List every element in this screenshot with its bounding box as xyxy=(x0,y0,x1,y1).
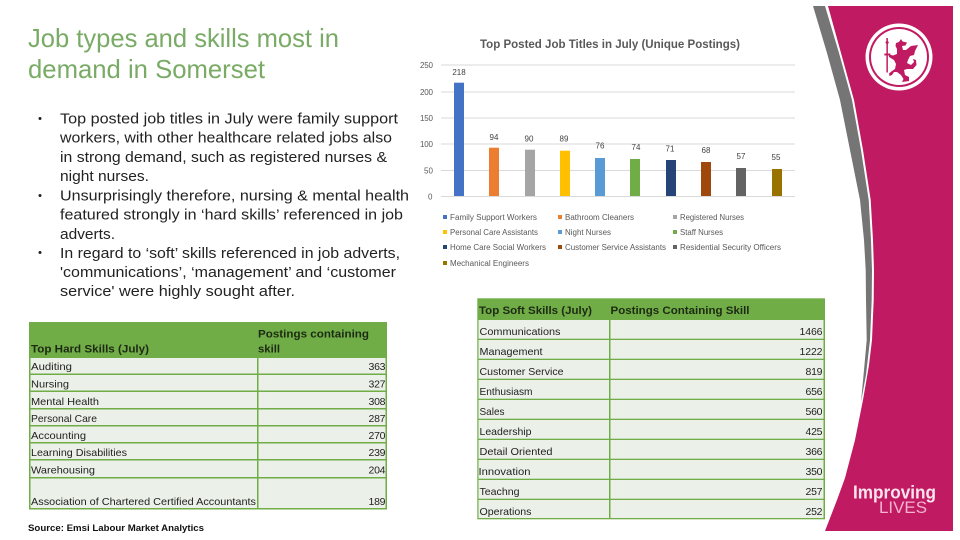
table rows: Warehousing xyxy=(31,465,95,477)
table rows: 204 xyxy=(368,465,386,477)
table: top hard skills xyxy=(29,322,387,510)
table rows: 819 xyxy=(806,366,823,378)
table rows: Communications xyxy=(480,326,560,338)
table rows xyxy=(478,326,823,518)
bullet text block: 'communications’, ‘management’ and ‘customer xyxy=(60,264,396,281)
table rows: Learning Disabilities xyxy=(31,447,127,459)
bullet text block: Unsurprisingly therefore, nursing & mental health xyxy=(60,188,409,204)
bullet text block: Top posted job titles in July were family support xyxy=(60,110,399,128)
bullet text block: night nurses. xyxy=(60,168,149,185)
table rows: Innovation xyxy=(478,466,531,478)
bars xyxy=(454,83,782,196)
bullet text block: adverts. xyxy=(60,226,115,243)
table: top soft skills xyxy=(477,298,825,519)
table rows: Teachng xyxy=(480,486,520,498)
legend: Residential Security Officers xyxy=(680,243,781,252)
legend: Registered Nurses xyxy=(680,213,744,222)
data labels: 68 xyxy=(702,146,711,155)
data labels xyxy=(452,68,781,162)
bullet text block: In regard to ‘soft’ skills referenced in job adverts, xyxy=(60,245,400,262)
table rows: Customer Service xyxy=(480,366,564,378)
legend xyxy=(443,213,781,268)
legend: Bathroom Cleaners xyxy=(565,213,634,222)
table rows: 270 xyxy=(368,430,386,442)
chart title: Top Posted Job Titles in July (Unique Postings) xyxy=(480,37,740,51)
title: demand in Somerset xyxy=(28,54,266,84)
data labels: 74 xyxy=(632,143,641,152)
table rows: 366 xyxy=(806,446,823,458)
data labels: 90 xyxy=(525,135,534,144)
title xyxy=(28,23,339,84)
logo text: Improving Lives xyxy=(853,482,936,517)
data labels: 89 xyxy=(560,135,569,144)
table grid xyxy=(477,298,825,519)
brand panel: curved magenta band xyxy=(813,6,953,531)
logo text: Improving Lives: LIVES xyxy=(879,498,927,517)
bullet text block: in strong demand, such as registered nurses & xyxy=(60,149,387,166)
table header xyxy=(479,305,750,317)
legend: Personal Care Assistants xyxy=(450,228,538,237)
table rows: 189 xyxy=(368,496,386,508)
table rows: 1466 xyxy=(800,326,823,338)
data labels: 218 xyxy=(452,68,466,77)
table header: skill xyxy=(258,344,280,356)
data labels: 71 xyxy=(666,145,675,154)
y axis and grid: 200 xyxy=(420,88,434,97)
table header xyxy=(31,329,369,356)
table rows: Sales xyxy=(480,406,504,418)
y axis and grid: 250 xyxy=(420,61,434,70)
table header: Postings containing xyxy=(258,329,369,341)
table rows: 252 xyxy=(806,506,823,518)
table rows: 1222 xyxy=(800,346,823,358)
table rows: Enthusiasm xyxy=(480,386,533,398)
table rows: 308 xyxy=(368,396,386,408)
logo text: Improving Lives: Improving xyxy=(853,482,936,502)
legend: Customer Service Assistants xyxy=(565,243,666,252)
table rows: Management xyxy=(480,346,543,358)
bullet text block: workers, with other healthcare related jobs also xyxy=(59,130,392,147)
table rows: Operations xyxy=(480,506,532,518)
data labels: 94 xyxy=(490,133,499,142)
table rows: Personal Care xyxy=(31,413,97,425)
table rows: 287 xyxy=(368,413,386,425)
legend: Night Nurses xyxy=(565,228,611,237)
bullet text block: service' were highly sought after. xyxy=(60,283,295,300)
table rows: 656 xyxy=(806,386,823,398)
data labels: 55 xyxy=(772,153,781,162)
table rows: Mental Health xyxy=(31,396,99,408)
bullet text block: featured strongly in ‘hard skills’ referenced in job xyxy=(60,206,403,224)
table rows: 425 xyxy=(806,426,823,438)
legend: Family Support Workers xyxy=(450,213,537,222)
table rows: Nursing xyxy=(31,379,69,391)
table header: Top Soft Skills (July) xyxy=(479,305,592,317)
table rows: 327 xyxy=(368,379,386,391)
legend: Mechanical Engineers xyxy=(450,259,529,268)
bar chart: top posted job titles xyxy=(420,37,795,268)
table rows: Auditing xyxy=(31,361,72,373)
y axis and grid: 100 xyxy=(420,140,434,149)
table grid xyxy=(29,322,387,510)
legend: Staff Nurses xyxy=(680,228,723,237)
data labels: 76 xyxy=(596,142,605,150)
table rows: 363 xyxy=(368,361,386,373)
table header: Postings Containing Skill xyxy=(610,305,750,317)
table rows: 239 xyxy=(368,447,386,459)
table rows: 560 xyxy=(806,406,823,418)
y axis and grid: 150 xyxy=(420,114,434,123)
title: Job types and skills most in xyxy=(28,23,339,53)
table header: Top Hard Skills (July) xyxy=(31,344,149,356)
table rows: 350 xyxy=(806,466,823,478)
table rows: Accounting xyxy=(31,430,86,442)
y axis and grid: 50 xyxy=(424,166,434,176)
legend: Home Care Social Workers xyxy=(450,243,546,252)
source note: Source: Emsi Labour Market Analytics xyxy=(28,523,204,533)
table rows: Leadership xyxy=(480,426,532,438)
table rows: 257 xyxy=(806,486,823,498)
y axis and grid xyxy=(420,61,795,202)
y axis and grid: 0 xyxy=(428,192,433,202)
bullet text block xyxy=(38,110,409,300)
table rows xyxy=(31,361,386,508)
icon: round dragon logo xyxy=(866,24,932,90)
table rows: Detail Oriented xyxy=(480,446,553,458)
table rows: Association of Chartered Certified Accountants xyxy=(31,496,256,508)
data labels: 57 xyxy=(737,152,746,161)
